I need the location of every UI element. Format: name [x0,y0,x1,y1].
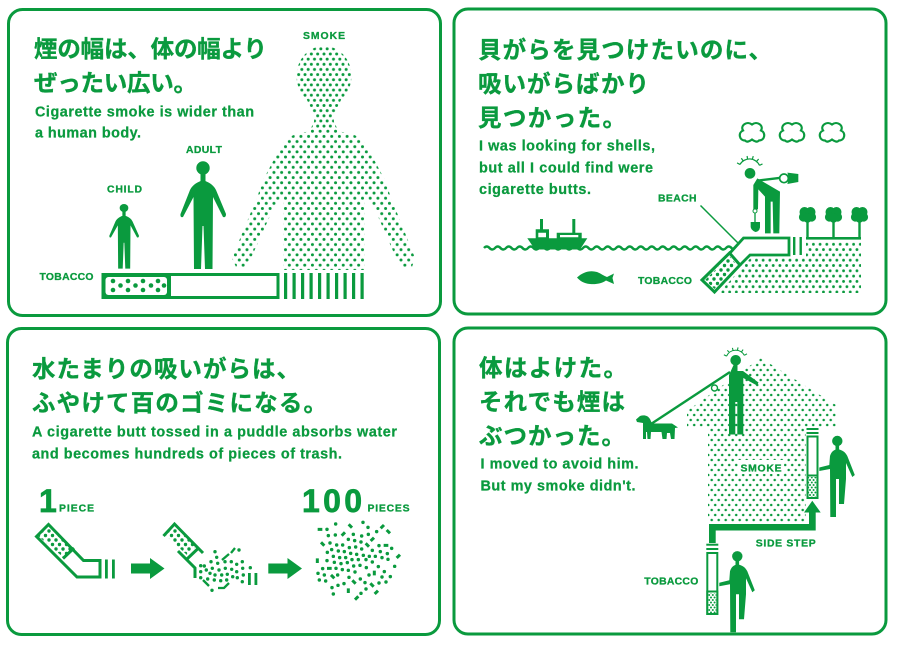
waves [484,246,737,250]
label: adult: ADULT [186,145,223,156]
arrow [131,558,164,579]
english caption: side step [480,456,638,494]
butt: one piece [36,524,115,578]
heading: side step [479,355,627,449]
heading: puddle [32,355,327,416]
english caption: smoke width: a human body. [35,126,141,142]
figure: person, upper [819,436,855,517]
heading: side step: 体はよけた。 [479,355,627,381]
english caption: smoke width [35,104,254,142]
heading: smoke width [34,36,267,96]
heading: shells [478,36,772,131]
number: 100 pieces [302,483,410,519]
figure: adult [180,161,226,269]
scatter: hundred pieces [316,521,400,600]
label: smoke: SMOKE [740,464,782,474]
heading: smoke width: ぜったい広い。 [34,70,197,96]
english caption: side step: But my smoke didn't. [480,478,636,494]
arrow: side step [709,501,821,543]
trees [799,207,868,240]
heading: side step: それでも煙は [479,389,625,415]
heading: puddle: ふやけて百のゴミになる。 [32,389,327,416]
figure: person, lower [719,551,755,632]
label: tobacco: TOBACCO [638,276,692,287]
english caption: smoke width: Cigarette smoke is wider than [35,104,254,120]
number: 100 pieces: 100 [302,483,362,519]
butt: breaking apart [164,524,257,592]
cigarette: lower [706,544,718,614]
figure: dotted smoke person [230,44,420,270]
icon: fish [577,271,614,284]
panel: puddle [8,328,440,634]
number: 100 pieces: PIECES [368,504,410,514]
english caption: puddle [32,424,397,462]
dotted smoke: house shape [687,358,836,522]
heading: shells: 貝がらを見つけたいのに、 [478,36,772,63]
label: tobacco: TOBACCO [644,576,698,588]
english caption: puddle: and becomes hundreds of pieces of trash. [32,446,342,462]
panel: side step [454,328,886,634]
figure: person with dog leash [651,347,758,434]
english caption: side step: I moved to avoid him. [480,456,638,472]
leader line [700,206,738,243]
label: beach: BEACH [658,194,696,204]
heading: shells: 見つかった。 [478,105,626,131]
english caption: shells: cigarette butts. [479,182,591,198]
icon: ship [527,219,587,250]
heading: puddle: 水たまりの吸いがらは、 [32,355,300,382]
cigarette tip: stripes [284,273,364,299]
number: 1 piece: 1 [39,483,57,519]
english caption: shells [479,138,655,198]
label: child: CHILD [107,184,142,196]
english caption: shells: I was looking for shells, [479,138,655,154]
cigarette: upper [806,428,818,498]
english caption: shells: but all I could find were [479,160,653,176]
panel: looking for shells [454,9,886,314]
label: tobacco: TOBACCO [40,272,94,283]
figure: person digging [737,156,798,233]
heading: shells: 吸いがらばかり [478,70,649,97]
clouds [740,123,844,142]
heading: smoke width: 煙の幅は、体の幅より [34,36,267,62]
panel: smoke is wider than a body [8,10,440,316]
label: smoke: SMOKE [303,31,345,42]
number: 1 piece: PIECE [59,504,94,514]
arrow [268,558,302,579]
label: side step: SIDE STEP [756,538,816,550]
dotted ground [719,242,861,293]
english caption: puddle: A cigarette butt tossed in a puddle absorbs water [32,424,397,440]
cigarette: horizontal [103,274,278,298]
figure: child [109,204,139,269]
label: smoke [738,460,784,474]
heading: side step: ぶつかった。 [479,423,625,449]
beach cigarette [702,237,802,292]
number: 1 piece [39,483,94,519]
icon: dog [636,415,678,439]
